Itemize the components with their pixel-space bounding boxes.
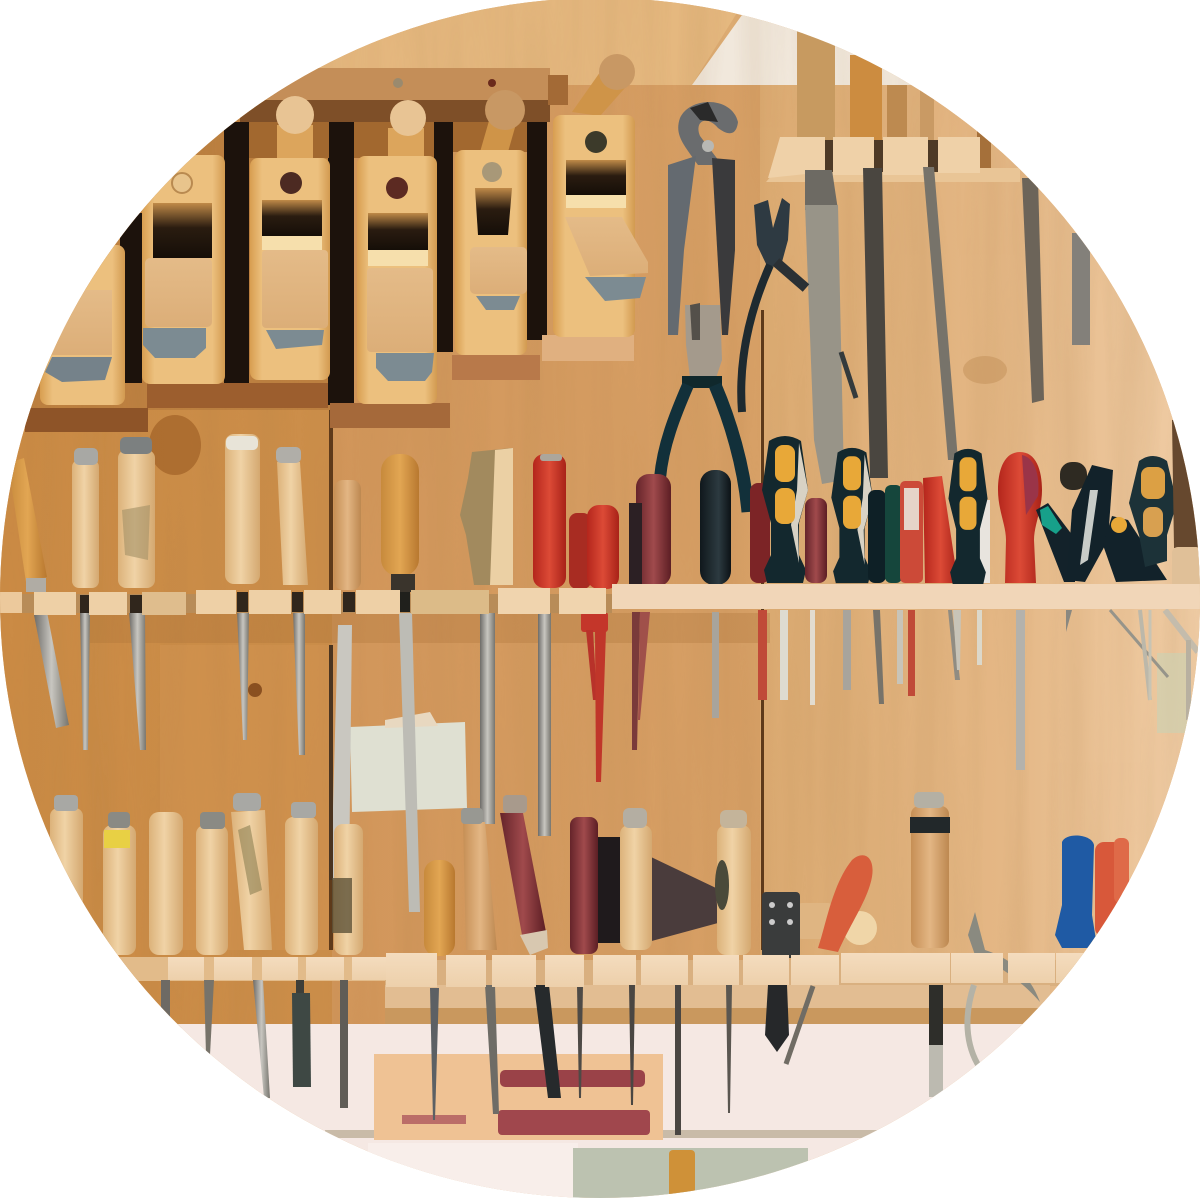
scraper and lower tools [598,837,1040,1002]
plane 5 [455,90,527,355]
plane base strips [25,335,634,432]
top rail for planes [240,68,568,122]
lower row handles [50,792,1129,956]
wera screwdriver 1 [762,436,808,583]
file: wide rasp [805,170,844,484]
file: short [1072,233,1090,345]
dark gaps between planes [120,122,547,405]
top tool rack with handles and files [766,30,1090,484]
wera screwdriver 4 [1129,456,1177,567]
wera screwdriver 3 [948,449,988,584]
lower row blades [161,980,980,1197]
plane 1 [40,245,125,405]
lower shelf backing [120,957,1085,1024]
wooden board with red stains [374,1054,663,1140]
combination pliers [660,303,748,512]
wood planes row [40,54,648,405]
lower shelf blocks [168,953,1086,987]
note on the wall [350,712,467,812]
file: thin [923,167,958,460]
white wall at the bottom [178,1024,1022,1198]
plane 6 [553,54,648,337]
file: dark [863,168,888,478]
green and black screwdrivers [1036,503,1076,582]
upper row handles: chisels [8,434,513,592]
plane 2 [142,155,225,384]
nippers [668,102,738,335]
file: right [1022,178,1044,403]
upper shelf [0,584,1200,615]
long-nose pliers [741,198,856,412]
upper row handles: screwdrivers [533,420,1200,602]
red screwdriver [998,452,1042,583]
wera screwdriver 2 [831,448,873,583]
upper row blades [34,610,1198,912]
plane 4 [357,100,437,404]
plane 3 [250,96,330,380]
